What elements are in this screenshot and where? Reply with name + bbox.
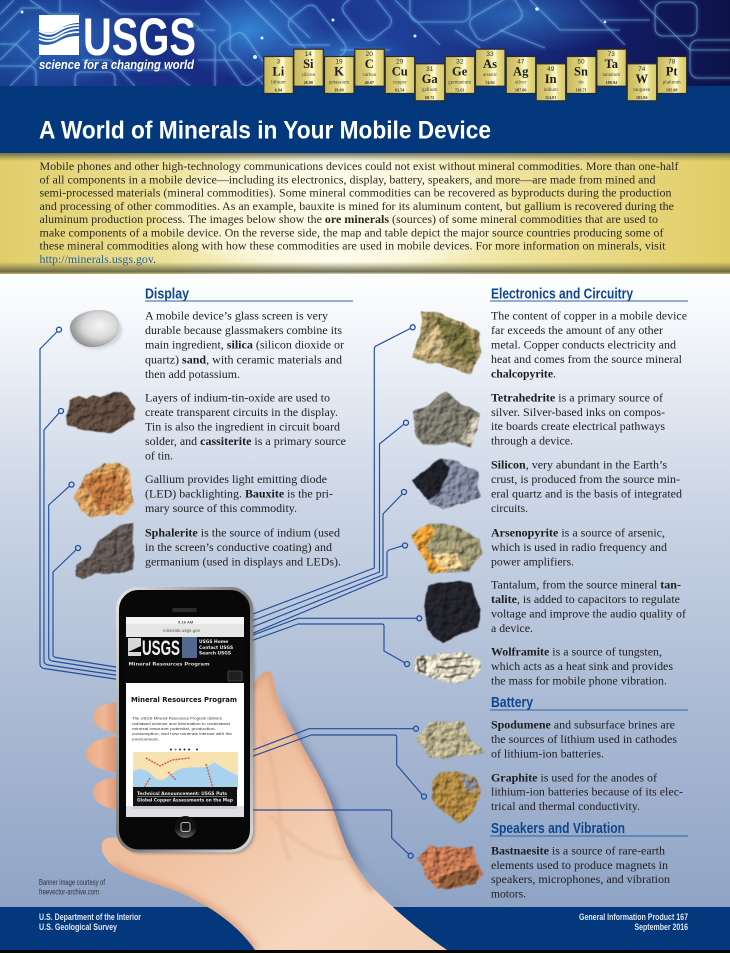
spodumene [417,720,485,759]
banner image credit: Banner image courtesy of [39,878,106,887]
text: tantalite: talite, is added to capacitors to regulate [491,592,680,606]
text: sphalerite [145,526,341,568]
text: bastnaesite [491,844,670,900]
tile: tantalum: tantalum [603,73,620,78]
site header [126,637,244,683]
introduction text: Mobile phones and other high-technology communications devices could not exist without mineral commodities. More than one-half [40,159,678,173]
text: spodumene [491,718,677,760]
text: tetrahedrite: Tetrahedrite is a primary source of [491,390,663,404]
tile: copper: Cu [392,64,408,78]
tile: arsenic [476,49,505,86]
logo tagline: science for a changing world [39,58,194,72]
tile: platinum: 78 [668,58,676,66]
tile: tungsten [627,64,657,101]
text: bastnaesite: speakers, microphones, and vibration [491,872,670,886]
panel: Speakers and Vibration column [490,820,688,900]
text: graphite: trical and thermal conductivity. [491,799,640,813]
tile: platinum: Pt [666,64,678,78]
text: cassiterite: create transparent circuits in the display. [145,405,338,419]
logo wordmark: USGS [83,8,196,67]
page background gradient [0,274,730,908]
text: chalcopyrite [491,308,687,380]
world map [133,752,238,790]
introduction text: aluminum production process. The images below show the ore minerals (sources) of some mineral commodities that are used to [40,212,658,226]
periodic table element tiles [264,49,687,101]
hand shadow [275,680,405,907]
tile: tantalum: 180.94 [606,80,618,85]
tile: carbon: 20 [366,51,373,58]
tile: carbon: carbon [362,73,377,78]
text: silica: then add potassium. [145,367,240,381]
header links [199,640,233,654]
tile: carbon [355,49,384,86]
panel: Battery column [490,694,688,813]
text: tetrahedrite [491,390,665,448]
tile: potassium: potassium [329,80,349,86]
tile: carbon: 40.07 [365,80,374,85]
text: arsenopyrite: power amplifiers. [491,554,574,568]
circuit lines: display minerals [40,327,122,680]
footer bar [0,907,730,950]
tile: tungsten: W [635,72,648,86]
announcement box [133,787,237,809]
text: silicon: circuits. [491,501,528,515]
tile: potassium [324,56,354,94]
arsenopyrite [412,522,482,573]
tile: germanium: Ge [452,64,468,78]
tile: tungsten: 74 [638,66,646,73]
finger 1 [93,703,125,736]
phone screen: Global Copper Assessments on the Map [137,798,233,804]
footer: agency: U.S. Department of the Interior [39,912,141,923]
tile: silver: 107.86 [515,88,526,92]
text: cassiterite: Layers of indium-tin-oxide are used to [145,390,330,404]
text: chalcopyrite: The content of copper in a mobile device [491,308,687,322]
introduction text: of all components in a mobile device—including its electronics, display, battery, speakers, and more—are made from mined and [40,172,656,186]
home button [174,816,196,838]
tile: gallium [415,64,445,101]
text: graphite [491,770,683,813]
status bar [126,617,244,624]
banner image credit: freevector-archive.com [39,888,99,896]
text: chalcopyrite: metal. Copper conducts electricity and [491,338,676,352]
tile: potassium: 39.09 [334,88,344,92]
tile: germanium [445,56,475,94]
tile: lithium [264,56,293,94]
text: tetrahedrite: silver. Silver-based inks on compos- [491,405,665,419]
tile: tungsten: tungsten [633,88,651,93]
browser toolbar [126,806,244,817]
text: arsenopyrite: which is used in radio frequency and [491,540,667,554]
heading: Electronics and Circuitry: Electronics and Circuitry [491,286,634,302]
tile: arsenic: 74.92 [485,80,495,85]
tile: silicon: 28.08 [304,80,313,85]
content paragraph: mineral resource potential, production, [132,727,216,731]
finger 3 [93,778,125,811]
text: arsenopyrite [491,526,667,568]
text: bastnaesite: elements used to produce magnets in [491,858,668,872]
text: tetrahedrite: through a device. [491,434,573,448]
tile: silicon [294,49,323,86]
circuit lines: battery and speaker minerals [245,726,426,858]
text: tetrahedrite: ite boards create electrical pathways [491,419,665,433]
tile: carbon: C [365,57,374,71]
text: chalcopyrite: heat and comes from the source mineral [491,352,683,366]
footer: agency: U.S. Geological Survey [39,922,118,933]
tile: lithium: 6.94 [275,88,283,92]
phone screen: minerals.usgs.gov [163,628,201,633]
text: tantalite: a device. [491,621,533,635]
tile: gallium: 69.72 [425,95,434,100]
speaker [172,608,197,612]
hand holding phone [86,660,460,953]
panel: Display column [145,286,353,568]
tile: tantalum: 73 [608,51,615,58]
wolframite [414,651,480,685]
text: bastnaesite: motors. [491,886,526,900]
text: bauxite: (LED) backlighting. Bauxite is the pri- [145,486,333,500]
footer: agency [39,912,141,933]
text: graphite: lithium-ion batteries because of its elec- [491,784,683,798]
phone shadow [119,592,255,854]
text: cassiterite: of tin. [145,448,173,462]
tile: germanium: 32 [456,58,464,66]
tile: indium: 114.81 [545,95,556,100]
tile: copper: copper [393,80,407,86]
tile: indium: In [545,72,557,86]
tantalite [425,582,480,643]
heading: Speakers and Vibration: Speakers and Vibration [491,820,625,837]
cassiterite [66,393,135,433]
tile: gallium: 31 [426,66,434,73]
text: spodumene: the sources of lithium used in cathodes [491,732,677,746]
content paragraph: consumption, and how minerals interact with the [132,732,232,736]
phone screen [126,617,244,817]
content paragraph [132,716,232,742]
text: silica: main ingredient, silica (silicon dioxide or [145,338,344,352]
silica sand [70,310,122,349]
tile: silver [506,56,536,94]
footer: publication [579,912,688,933]
text: bauxite: Gallium provides light emitting diode [145,472,327,486]
tile: lithium: lithium [271,80,286,86]
USGS logo [39,8,196,72]
text: wolframite [491,644,673,688]
tile: silicon: silicon [302,73,315,78]
text: wolframite: Wolframite is a source of tungsten, [491,644,662,658]
tile: indium [536,64,566,101]
tile: gallium: gallium [422,88,437,93]
text: silicon: Silicon, very abundant in the Earth’s [491,458,667,472]
text: graphite: Graphite is used for the anodes of [491,770,657,784]
tile: copper [385,56,415,94]
text: silicon: eral quartz and is the basis of integrated [491,486,682,500]
circuit lines: electronics minerals [245,325,422,666]
phone body [118,588,252,851]
text: silica: durable because glassmakers combine its [145,323,342,337]
tetrahedrite [413,391,480,447]
text: wolframite: the mass for mobile phone vibration. [491,674,667,688]
title bar [0,86,730,153]
text: cassiterite [145,390,346,462]
phone screen: Technical Announcement: USGS Puts [137,791,227,797]
logo wave mark [39,15,79,55]
chalcopyrite [412,312,481,375]
text: silica [145,308,344,381]
introduction text: make components of a mobile device. On the reverse side, the map and table depict the major source countries producing some of [40,225,664,239]
sphalerite [75,523,134,579]
tile: lithium: Li [272,64,285,78]
heading: Battery: Battery [491,694,534,711]
tile: tungsten: 183.84 [636,95,648,100]
text: silica: quartz) sand, with ceramic materials and [145,352,342,366]
text: chalcopyrite: far exceeds the amount of any other [491,323,663,337]
tile: germanium: 72.63 [455,88,464,92]
tile: tin: tin [578,80,584,86]
banner: circuit board image [0,0,730,86]
bauxite [75,463,134,517]
tile: gallium: Ga [422,72,438,86]
tile: lithium: 3 [276,58,280,66]
tile: copper: 63.54 [395,88,405,92]
introduction text [40,159,678,266]
introduction text: http://minerals.usgs.gov. [40,252,156,266]
bastnaesite [418,846,482,888]
palm and thumb [102,671,447,950]
header links: Search USGS [199,650,231,656]
content paragraph: The USGS Mineral Resources Program delivers [132,716,222,720]
introduction text: and processing of other commodities. As an example, bauxite is mined for its aluminum content, but gallium is recovered during the [40,199,674,213]
content heading: Mineral Resources Program [131,695,237,704]
tile: platinum: platinum [663,80,681,86]
tile: potassium: 19 [335,58,343,66]
header links: USGS Home [199,639,228,645]
content paragraph: unbiased science and information to understand [132,722,230,726]
tile: tantalum [597,49,626,86]
tile: copper: 29 [396,58,404,66]
phone screen: 9:16 AM [178,620,194,624]
smartphone [118,588,255,854]
tile: silver: 47 [517,58,525,66]
text: wolframite: which acts as a heat sink and provides [491,659,673,673]
text: bastnaesite: Bastnaesite is a source of rare-earth [491,844,665,858]
banner image credit [39,878,106,896]
tile: arsenic: As [483,57,497,71]
tile: arsenic: arsenic [483,73,498,78]
slider dots [170,748,198,750]
tile: tin [566,56,596,94]
text: tantalite [491,578,686,635]
title: A World of Minerals in Your Mobile Device [39,116,491,144]
introduction text: these mineral commodities along with how these commodities are used in mobile devices. For more information on minerals, visit [40,238,666,252]
text: bauxite: mary source of this commodity. [145,501,297,515]
finger 2 [86,737,125,773]
header links: Contact USGS [199,645,233,651]
footer: publication: General Information Product 167 [579,912,688,923]
menu button [228,671,242,681]
text: arsenopyrite: Arsenopyrite is a source of arsenic, [491,526,665,540]
mini USGS logo [128,638,180,656]
text: silica: A mobile device’s glass screen is very [145,308,328,322]
text: silicon: crust, is produced from the source min- [491,472,680,486]
text: cassiterite: solder, and cassiterite is a primary source [145,434,346,448]
text: cassiterite: Tin is also the ingredient in circuit board [145,420,340,434]
tile: platinum: 195.08 [666,88,677,92]
tile: potassium: K [334,64,344,78]
text: chalcopyrite: chalcopyrite. [491,366,556,380]
tile: tin: Sn [574,64,588,78]
tile: silicon: 14 [305,51,312,58]
text: sphalerite: Sphalerite is the source of indium (used [145,526,340,540]
tile: silver: silver [515,80,527,86]
tile: indium: indium [544,88,558,93]
mini USGS logo: USGS [142,637,180,660]
tile: platinum [657,56,687,94]
footer: publication: September 2016 [634,922,688,933]
tile: tin: 50 [577,58,585,66]
graphite [431,772,481,823]
tile: tin: 118.71 [575,88,587,92]
tile: silver: Ag [513,64,529,78]
tile: silicon: Si [303,57,314,71]
mineral images [66,310,485,888]
introduction text: semi-processed materials (mineral commodities). Some mineral commodities can be recovered as byproducts during the production [40,186,672,200]
panel: Electronics and Circuitry column [490,286,688,688]
tile: tantalum: Ta [605,57,619,71]
panel: yellow introduction [0,153,730,274]
text: sphalerite: in the screen’s conductive coating) and [145,540,332,554]
program bar: Mineral Resources Program [128,662,210,668]
text: spodumene: Spodumene and subsurface brines are [491,718,675,732]
text: bauxite [145,472,333,515]
content paragraph: environment. [132,738,159,742]
text: silicon [491,458,682,515]
tile: indium: 49 [547,66,555,73]
text: spodumene: of lithium-ion batteries. [491,746,604,760]
text: sphalerite: germanium (used in displays and LEDs). [145,554,341,568]
text: tantalite: Tantalum, from the source mineral tan- [491,578,681,592]
text: tantalite: voltage and improve the audio quality of [491,606,686,620]
footer bottom strip [0,950,730,953]
address bar [126,624,244,637]
tile: arsenic: 33 [486,51,494,58]
tile: germanium: germanium [448,80,471,86]
header photo [182,637,197,658]
heading: Display: Display [145,286,190,302]
silicon [411,458,480,510]
